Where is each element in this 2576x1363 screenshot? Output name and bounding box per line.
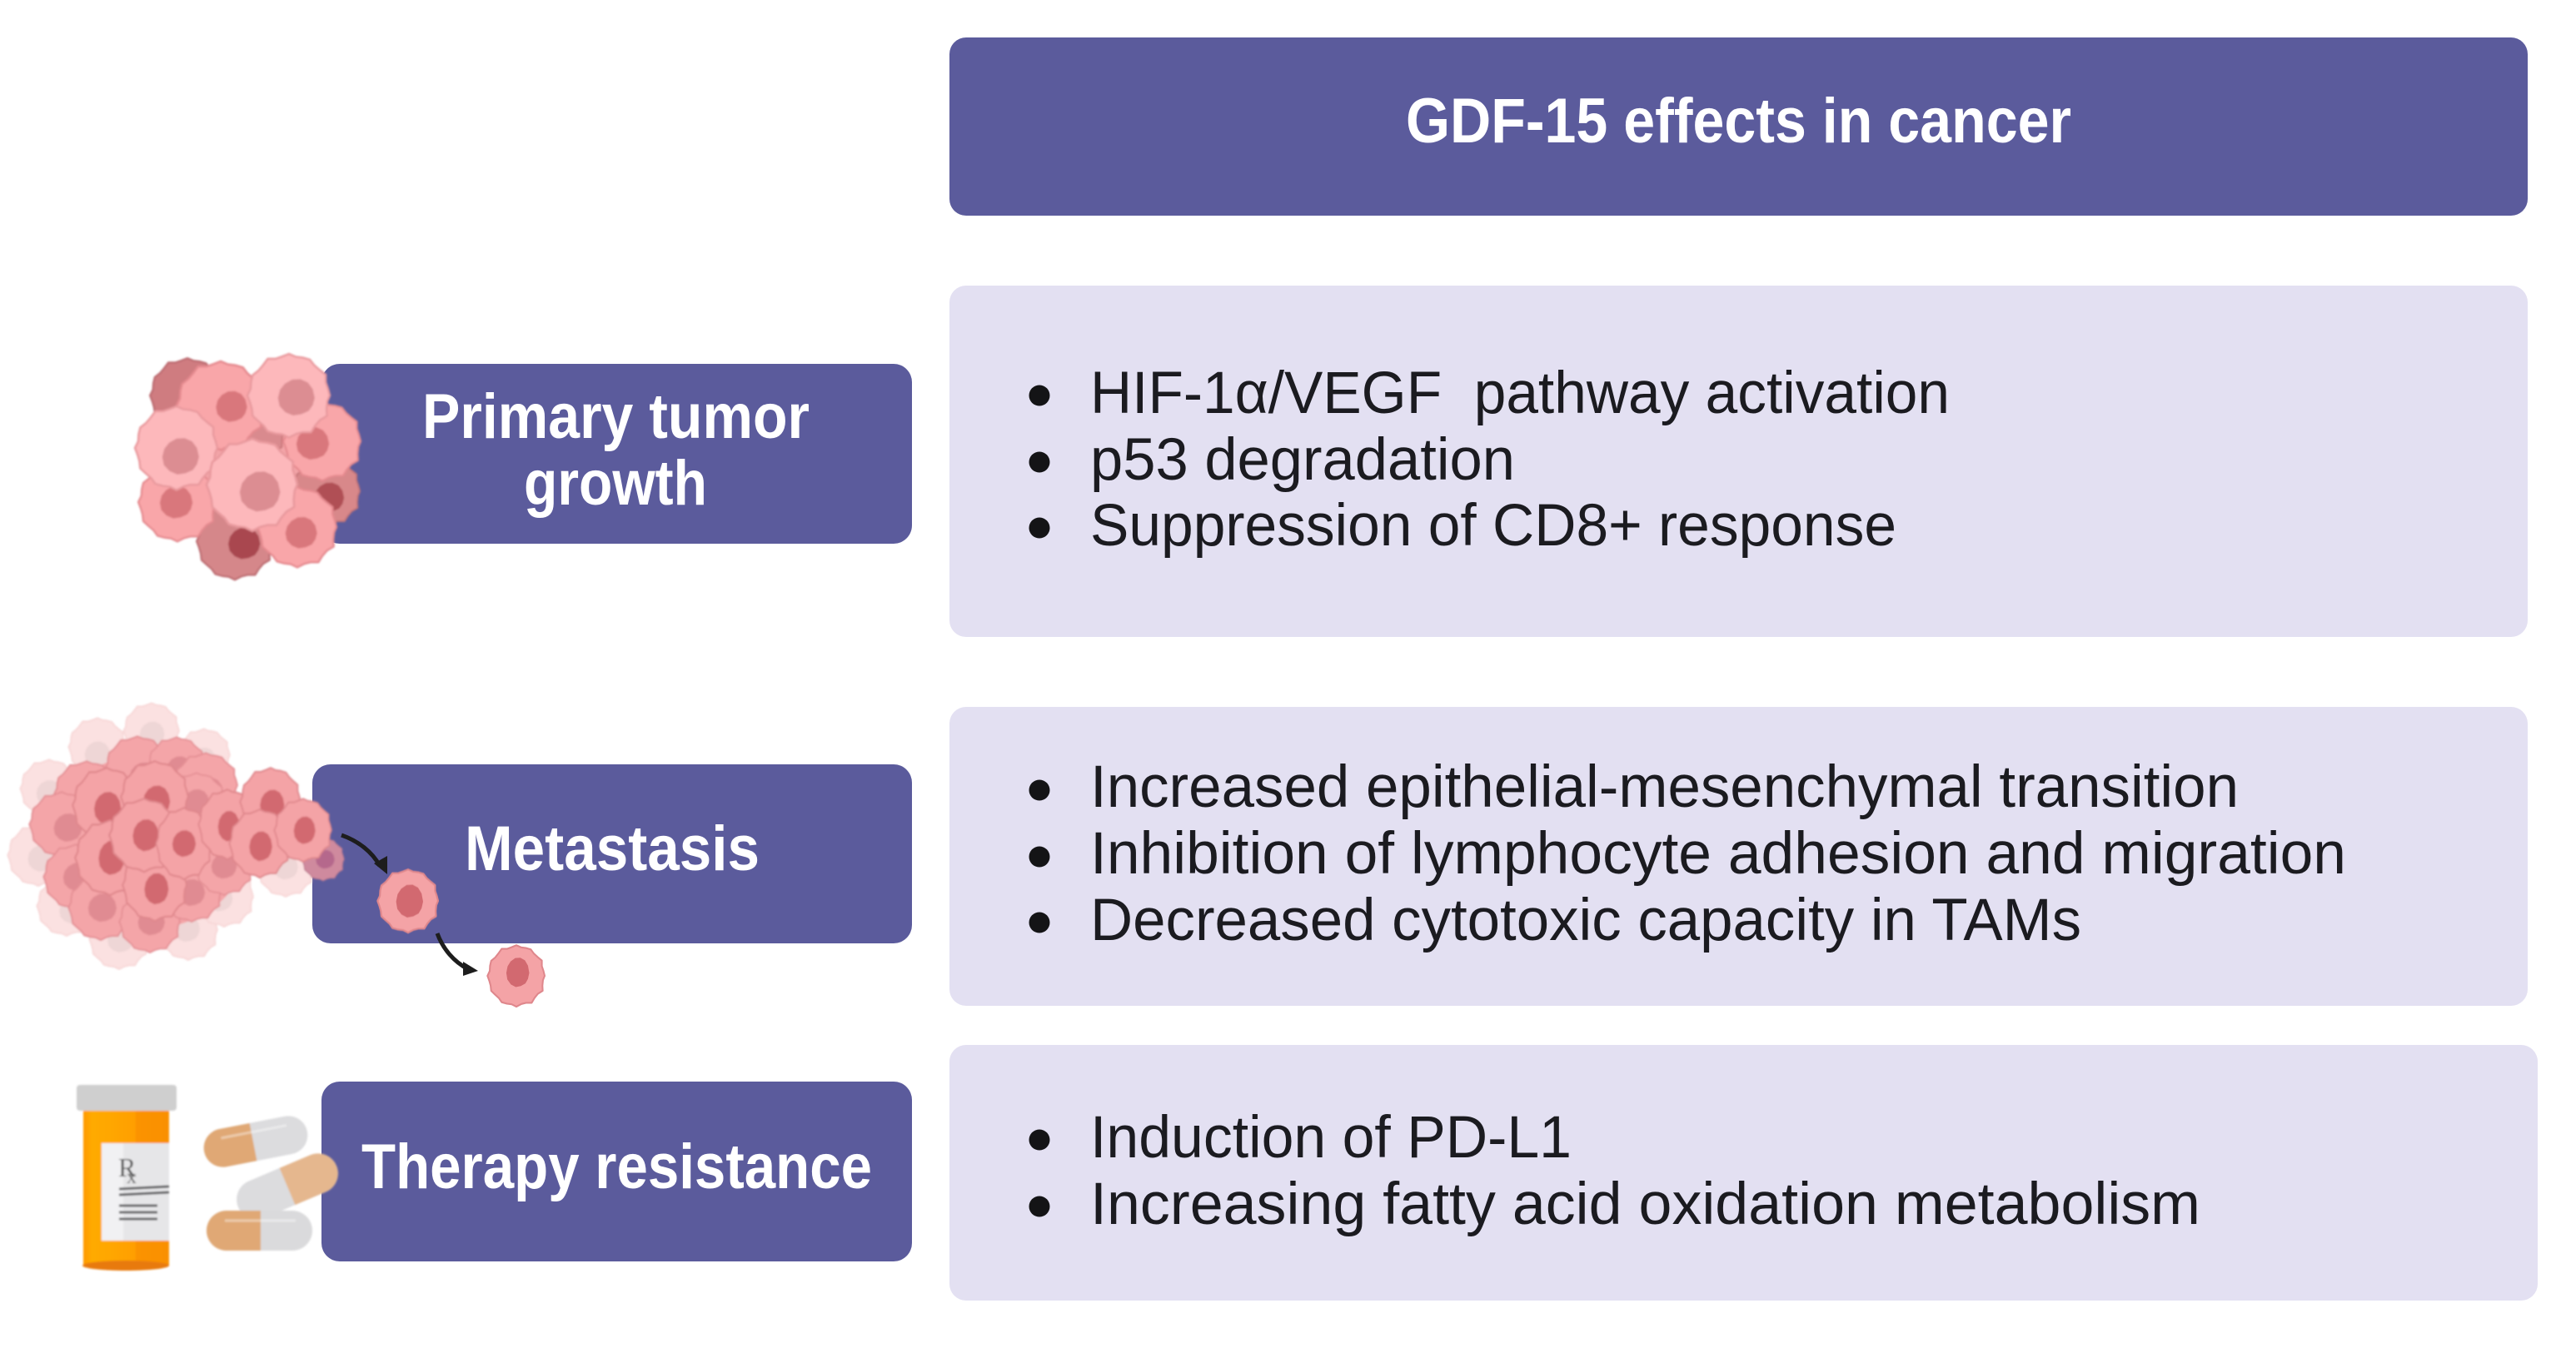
label: primary tumor growth: Primary tumor <box>422 381 810 452</box>
panel: therapy resistance effects <box>949 1045 2538 1301</box>
panel: metastasis effects <box>949 707 2528 1006</box>
capsule: upper <box>201 1112 311 1171</box>
arrow: from cluster to migrating cell <box>341 835 387 874</box>
bullet list: therapy resistance: Increasing fatty acid oxidation metabolism <box>1090 1171 2200 1237</box>
cluster fill <box>52 754 248 928</box>
bullet list: metastasis <box>1029 754 2346 953</box>
bullet list: metastasis: Increased epithelial-mesenchymal transition <box>1090 754 2239 820</box>
front layer cells <box>72 761 331 921</box>
label: metastasis <box>312 764 912 943</box>
label: primary tumor growth: growth <box>524 448 707 519</box>
icon: prescription bottle <box>77 1085 177 1271</box>
header: GDF-15 effects in cancer: GDF-15 effects in cancer <box>1406 86 2071 157</box>
panel: primary tumor growth effects <box>949 286 2528 637</box>
prescription symbol: R <box>118 1152 137 1182</box>
icon: migrating cell on label <box>377 869 438 933</box>
label: metastasis: Metastasis <box>465 813 760 884</box>
middle layer cells <box>29 736 252 953</box>
bullet list: primary tumor growth <box>1029 361 1950 559</box>
label: therapy resistance: Therapy resistance <box>361 1132 872 1202</box>
purple cell overlapping the label <box>301 838 344 881</box>
bullet list: primary tumor growth: Suppression of CD8+ response <box>1090 493 1896 559</box>
icon: capsule pills <box>201 1112 344 1251</box>
bullet list: therapy resistance <box>1029 1105 2200 1237</box>
arrow: from migrating cell to distant cell <box>437 933 478 976</box>
icon: primary tumor cell cluster <box>135 354 361 580</box>
bullet list: metastasis: Inhibition of lymphocyte adhesion and migration <box>1090 821 2346 887</box>
icon: metastasizing tumor cell cluster <box>7 703 344 969</box>
bullet list: primary tumor growth: p53 degradation <box>1090 427 1515 493</box>
label: primary tumor growth <box>321 364 912 544</box>
faded background cells <box>7 703 313 969</box>
prescription symbol: x <box>127 1167 137 1188</box>
icon: distant metastatic cell <box>487 945 545 1007</box>
bullet list: therapy resistance: Induction of PD-L1 <box>1090 1105 1572 1171</box>
bullet list: metastasis: Decreased cytotoxic capacity in TAMs <box>1090 888 2081 953</box>
bullet list: primary tumor growth: HIF-1α/VEGF pathway activation <box>1090 361 1950 426</box>
header: GDF-15 effects in cancer <box>949 37 2528 216</box>
label: therapy resistance <box>321 1082 912 1261</box>
capsule: middle, overlapping label <box>231 1147 344 1226</box>
capsule: lower <box>207 1211 312 1251</box>
